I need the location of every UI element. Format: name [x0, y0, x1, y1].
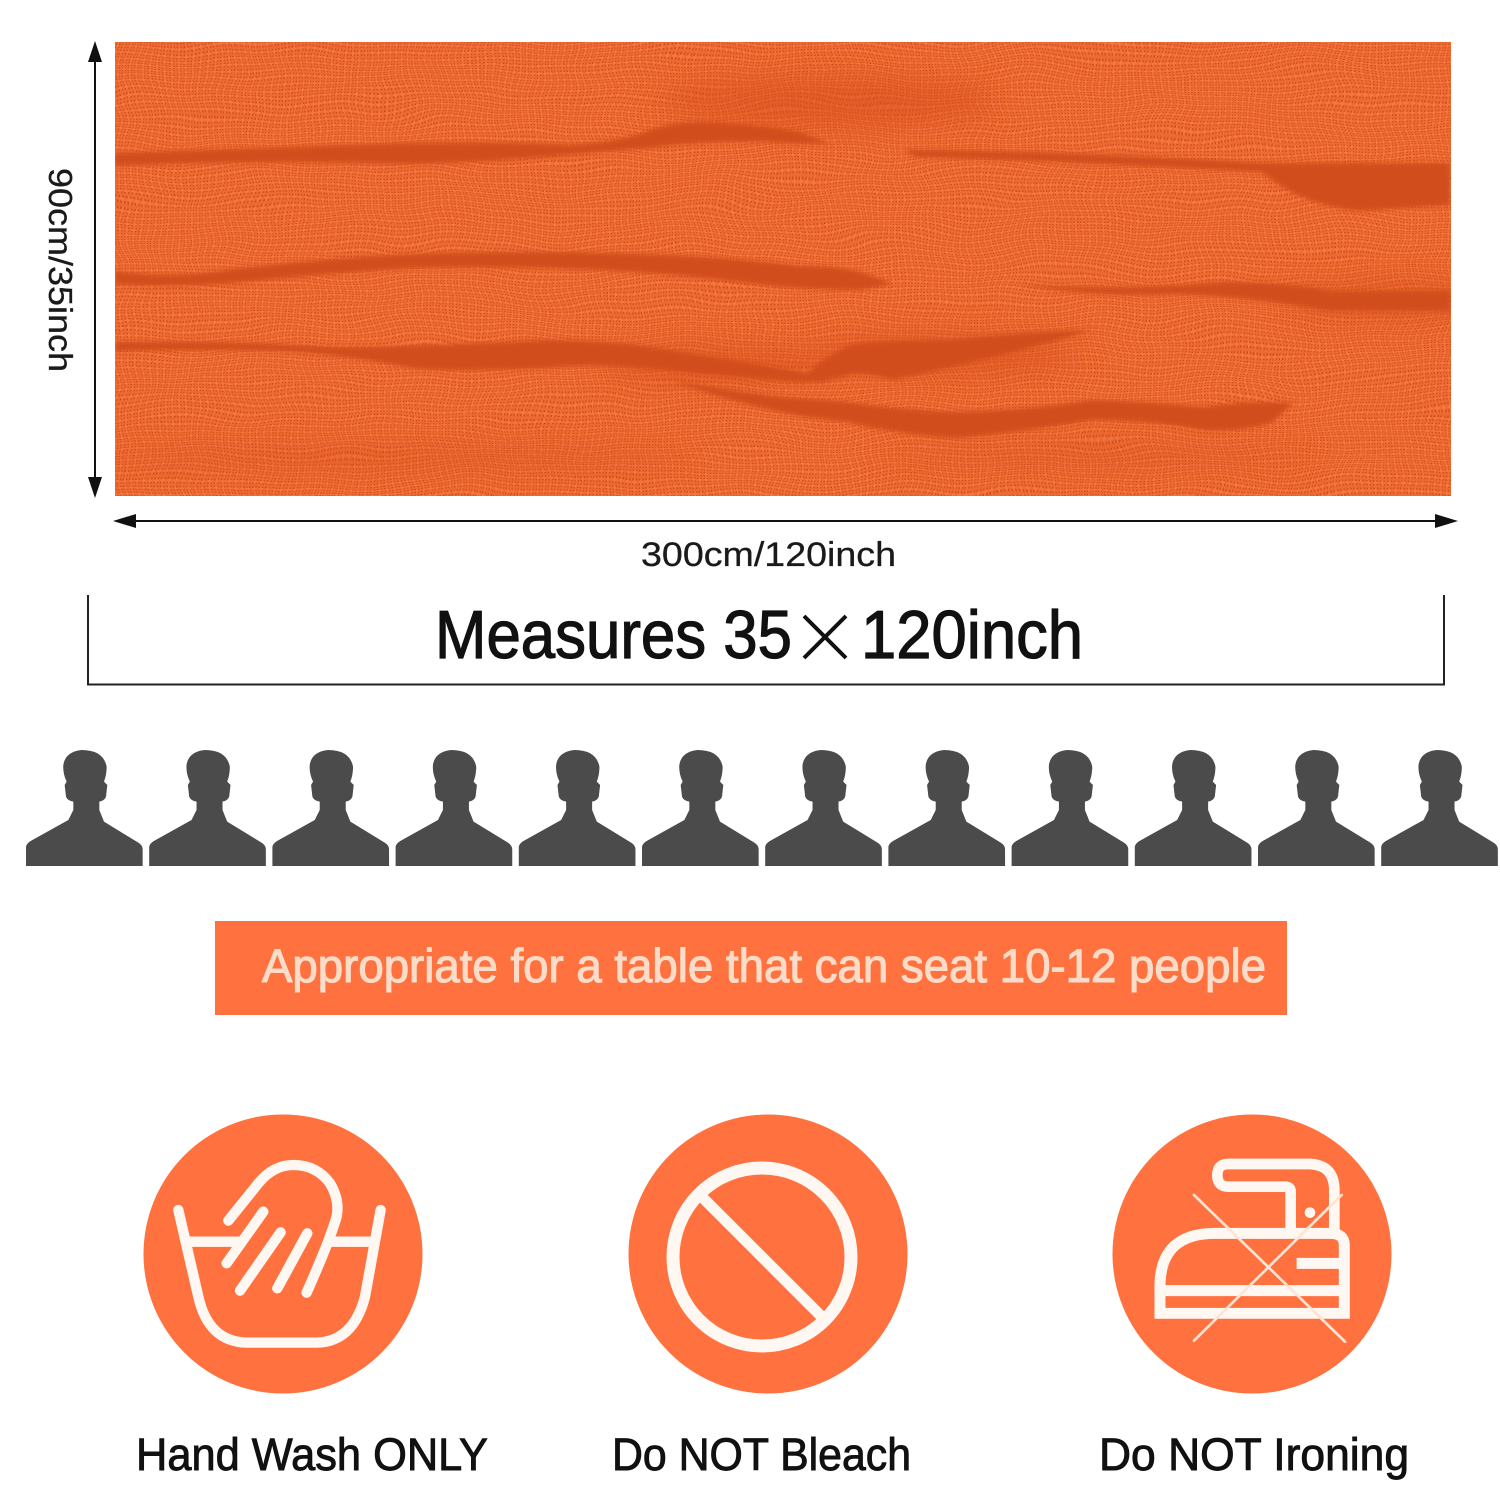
heading: measures: [435, 597, 1083, 673]
person 9: [1012, 750, 1128, 866]
person 12: [1381, 750, 1498, 866]
heading: measures: Measures 35: [435, 597, 792, 673]
person 1: [26, 750, 143, 866]
caption: hand wash: Hand Wash ONLY: [136, 1429, 488, 1480]
heading: measures: 120inch: [861, 597, 1083, 673]
person 8: [888, 750, 1005, 866]
people row: [26, 750, 1498, 866]
banner: seating capacity: Appropriate for a table that can seat 10-12 people: [262, 939, 1266, 992]
panel: orange cheesecloth fabric: [100, 32, 1500, 506]
caption: no bleach: Do NOT Bleach: [612, 1429, 911, 1480]
person 3: [272, 750, 389, 866]
arrow: horizontal dimension: [113, 514, 1458, 528]
person 4: [396, 750, 512, 866]
banner: seating capacity: [215, 921, 1287, 1015]
icon: hand wash: [144, 1114, 422, 1394]
icon: no ironing: [1112, 1114, 1392, 1394]
person 5: [519, 750, 635, 866]
person 6: [642, 750, 759, 866]
label: fabric height: 90cm/35inch: [42, 168, 79, 372]
person 11: [1258, 750, 1375, 866]
person 10: [1135, 750, 1251, 866]
label: fabric width: 300cm/120inch: [641, 536, 896, 574]
bracket: [88, 595, 1444, 684]
arrow: vertical dimension: [88, 41, 102, 498]
icon: no bleach: [628, 1114, 908, 1394]
person 2: [149, 750, 266, 866]
caption: no ironing: Do NOT Ironing: [1099, 1429, 1409, 1480]
person 7: [765, 750, 882, 866]
